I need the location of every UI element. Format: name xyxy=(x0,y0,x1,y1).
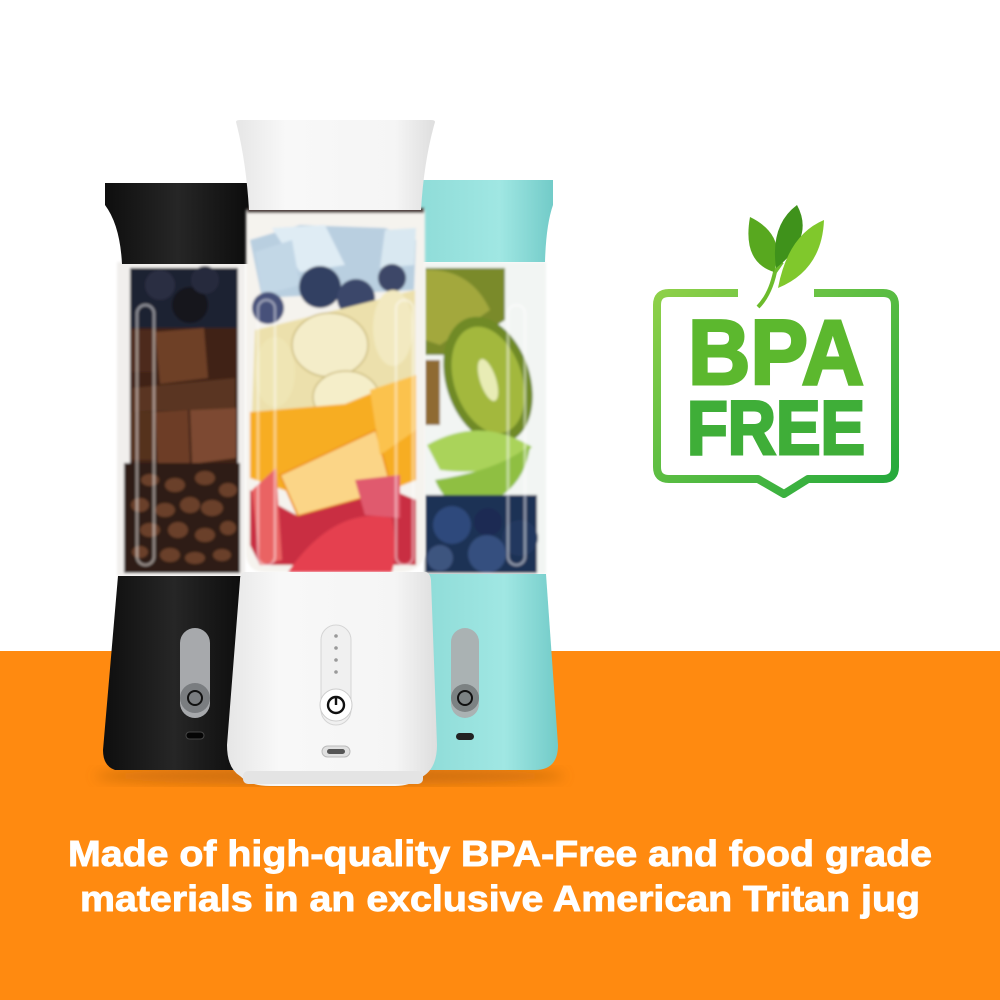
blender: white with fruit xyxy=(227,120,437,786)
caption xyxy=(68,833,932,919)
black control panel xyxy=(180,628,210,739)
teal cap xyxy=(420,180,553,262)
white cap xyxy=(236,120,435,210)
badge: BPA FREE: FREE xyxy=(687,386,865,471)
teal base xyxy=(425,574,558,770)
black jar contents xyxy=(117,262,245,576)
blender: teal with kiwi and blueberries xyxy=(420,180,558,770)
caption: materials in an exclusive American Tritan jug xyxy=(80,878,920,919)
background: orange band xyxy=(0,651,1000,1000)
badge frame xyxy=(657,293,895,494)
badge leaves xyxy=(748,205,824,307)
white control panel xyxy=(320,625,352,757)
teal jar contents xyxy=(424,262,548,574)
product shadow xyxy=(95,767,565,785)
white base xyxy=(227,572,437,786)
blender: black with chocolate and coffee xyxy=(103,183,250,770)
white jar contents xyxy=(246,208,425,572)
caption: Made of high-quality BPA-Free and food grade xyxy=(68,833,932,874)
black cap xyxy=(105,183,250,264)
badge: BPA FREE xyxy=(657,205,895,494)
black base xyxy=(103,576,245,770)
teal control panel xyxy=(451,628,479,740)
badge text: BPA xyxy=(688,302,864,404)
